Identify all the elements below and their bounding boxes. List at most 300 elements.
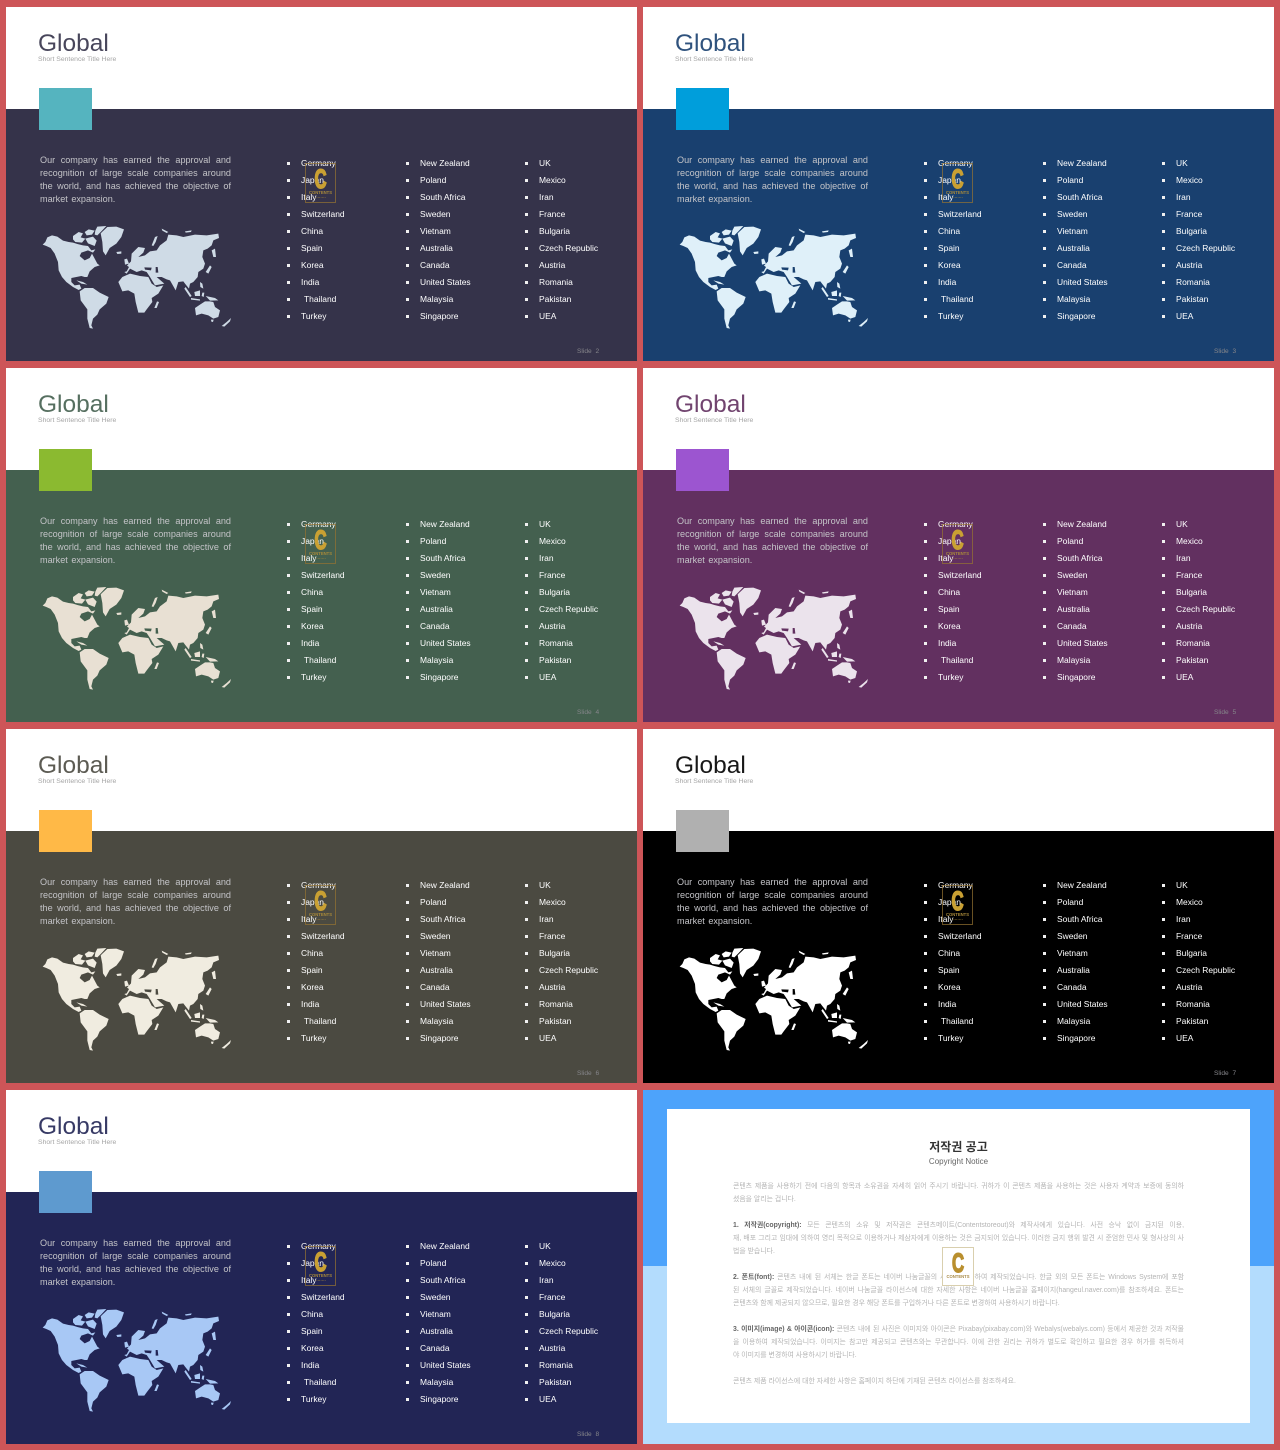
country list: column 2: Poland xyxy=(1057,897,1083,907)
country list: column 2: New Zealand xyxy=(420,158,470,168)
dark band xyxy=(644,109,1274,361)
country list: column 3: Iran xyxy=(539,1275,554,1285)
country list: column 3: Romania xyxy=(1176,277,1210,287)
country list: column 2: Poland xyxy=(420,897,446,907)
country list: column 3: UK xyxy=(539,1241,551,1251)
text block: description: recognition of large scale companies around xyxy=(40,1251,231,1261)
country list: column 1: Germany xyxy=(938,158,973,168)
country list: column 2: Singapore xyxy=(1057,672,1095,682)
country list: column 3: France xyxy=(1176,570,1202,580)
country list: column 1: Germany xyxy=(938,880,973,890)
panel: slide 6 xyxy=(7,729,637,1083)
country list: column 1: Spain xyxy=(938,243,960,253)
country list: column 2: South Africa xyxy=(1057,914,1102,924)
country list: column 2 xyxy=(1043,880,1108,1043)
watermark logo xyxy=(305,163,336,203)
country list: column 1: Spain xyxy=(301,604,323,614)
panel: slide 4 xyxy=(7,368,637,722)
watermark logo xyxy=(305,524,336,564)
country list: column 3: UEA xyxy=(539,672,556,682)
notice body text: 을 이용하여 제작되었습니다. 이미지는 참고만 제공되고 콘텐츠와는 무관합니다. 이에 관한 권리는 귀하가 별도로 확인하고 필요한 경우 허가를 취득하셔 xyxy=(733,1339,1184,1346)
country list: column 3: Austria xyxy=(539,982,565,992)
country list: column 3: Austria xyxy=(539,621,565,631)
country list: column 1: Italy xyxy=(301,914,316,924)
country list: column 2: Canada xyxy=(1057,982,1087,992)
text block: description xyxy=(677,516,868,565)
country list: column 3: Pakistan xyxy=(539,294,571,304)
country list: column 3: Czech Republic xyxy=(1176,965,1235,975)
watermark logo: ········ xyxy=(315,194,326,200)
text block: description: the world, and has achieved the objective of xyxy=(40,1264,231,1274)
accent square xyxy=(39,449,92,491)
country list: column 1: Switzerland xyxy=(301,931,345,941)
country list: column 2: Vietnam xyxy=(420,1309,451,1319)
text block: description: the world, and has achieved the objective of xyxy=(40,542,231,552)
country list: column 1: Spain xyxy=(938,965,960,975)
text block: description: recognition of large scale companies around xyxy=(40,890,231,900)
country list: column 1: Germany xyxy=(301,880,336,890)
country list: column 2: United States xyxy=(420,277,471,287)
country list: column 1: Spain xyxy=(301,1326,323,1336)
country list: column 2: New Zealand xyxy=(420,1241,470,1251)
watermark logo: ········ xyxy=(952,556,963,560)
country list: column 1: Korea xyxy=(301,260,324,270)
country list: column 1: Korea xyxy=(938,982,961,992)
country list: column 1: Turkey xyxy=(301,311,326,321)
country list: column 1: Korea xyxy=(301,1343,324,1353)
country list: column 3: Pakistan xyxy=(539,1377,571,1387)
watermark logo: CONTENTS xyxy=(309,551,332,556)
watermark logo xyxy=(942,524,973,564)
world map xyxy=(42,948,231,1051)
country list: column 2 xyxy=(1043,158,1108,321)
country list: column 1 xyxy=(287,880,345,1043)
text block: description: Our company has earned the approval and xyxy=(677,516,868,526)
text block: description xyxy=(677,876,868,926)
country list: column 3: UEA xyxy=(539,311,556,321)
country list: column 3: Bulgaria xyxy=(539,226,570,236)
country list: column 3 xyxy=(1162,880,1235,1043)
slide number: Slide 7 xyxy=(1214,1070,1236,1077)
country list: column 1: Switzerland xyxy=(301,1292,345,1302)
country list: column 2: Australia xyxy=(420,604,453,614)
country list: column 1: Korea xyxy=(938,621,961,631)
accent square xyxy=(676,88,729,130)
watermark logo: ········ xyxy=(315,916,326,922)
country list: column 1: Germany xyxy=(938,519,973,529)
country list: column 2: South Africa xyxy=(420,914,466,924)
country list: column 2: Poland xyxy=(1057,175,1083,185)
country list: column 1: Korea xyxy=(301,621,324,631)
text block: description: the world, and has achieved the objective of xyxy=(677,181,868,191)
watermark logo: C xyxy=(314,886,327,916)
subtitle: Short Sentence Title Here xyxy=(38,1139,116,1146)
country list: column 2: Malaysia xyxy=(420,1016,453,1026)
country list: column 3: France xyxy=(539,209,565,219)
country list: column 3: UEA xyxy=(539,1394,556,1404)
text block: description: the world, and has achieved the objective of xyxy=(677,542,868,552)
text block: description: market expansion. xyxy=(40,555,115,565)
country list: column 3 xyxy=(525,158,598,321)
watermark logo: C xyxy=(951,164,964,194)
text block: description: market expansion. xyxy=(677,194,752,204)
country list: column 2: United States xyxy=(420,1360,471,1370)
country list: column 2: Vietnam xyxy=(420,948,451,958)
watermark logo: ········ xyxy=(315,556,326,560)
country list: column 3 xyxy=(525,1241,598,1404)
notice body text: 재, 배포 그리고 임대에 의하여 영리 목적으로 이용하거나 제삼자에게 이용하는 것은 금지되어 있습니다. 이러한 금지 행위 발견 시 준엄한 민사 및 형사상의 사 xyxy=(733,1235,1184,1242)
country list: column 2: Australia xyxy=(1057,965,1090,975)
country list: column 3: Romania xyxy=(539,999,573,1009)
text block: description xyxy=(677,154,868,204)
country list: column 3: Pakistan xyxy=(539,1016,571,1026)
country list: column 1: Spain xyxy=(938,604,960,614)
watermark logo: ········ xyxy=(952,194,963,200)
text block: description: the world, and has achieved the objective of xyxy=(40,181,231,191)
accent square xyxy=(676,449,729,491)
country list: column 2: United States xyxy=(1057,638,1108,648)
text block: description: market expansion. xyxy=(40,916,115,926)
watermark logo: C xyxy=(951,886,964,916)
country list: column 2: South Africa xyxy=(420,553,466,563)
subtitle: Short Sentence Title Here xyxy=(675,778,753,785)
country list: column 2: Malaysia xyxy=(1057,1016,1090,1026)
country list: column 2: Sweden xyxy=(420,931,450,941)
country list: column 1: India xyxy=(301,638,319,648)
country list: column 2: Vietnam xyxy=(420,226,451,236)
country list: column 2: New Zealand xyxy=(1057,519,1107,529)
watermark logo: ········ xyxy=(952,916,963,922)
country list: column 2: Sweden xyxy=(1057,931,1088,941)
text block: description: recognition of large scale companies around xyxy=(40,168,231,178)
country list: column 1: China xyxy=(938,587,960,597)
watermark logo: C xyxy=(314,1247,327,1277)
country list: column 2: Singapore xyxy=(1057,1033,1095,1043)
text block: description: the world, and has achieved the objective of xyxy=(40,903,231,913)
country list: column 2: Vietnam xyxy=(1057,226,1088,236)
country list: column 2: Vietnam xyxy=(420,587,451,597)
text block: description: market expansion. xyxy=(677,916,752,926)
country list: column 3: UK xyxy=(1176,880,1188,890)
world map xyxy=(680,226,868,329)
title: Global xyxy=(675,391,746,418)
country list: column 1: China xyxy=(301,948,323,958)
country list: column 2: Poland xyxy=(420,536,446,546)
country list: column 2: Malaysia xyxy=(420,655,453,665)
notice body text: 3. 이미지(image) & 아이콘(icon): 콘텐츠 내에 된 사진은 이미지와 아이콘은 Pixabay(pixabay.com)와 Webalys(webalys.com) 등에서 제공한 것과 저작물 xyxy=(733,1326,1184,1333)
country list: column 2: Sweden xyxy=(420,1292,450,1302)
country list: column 2 xyxy=(406,1241,471,1404)
country list: column 2: Malaysia xyxy=(420,294,453,304)
country list: column 1: Italy xyxy=(938,914,953,924)
country list: column 1: Japan xyxy=(938,175,961,185)
text block: description: market expansion. xyxy=(40,1277,115,1287)
country list: column 1: Italy xyxy=(301,1275,316,1285)
accent square xyxy=(39,88,92,130)
text block: description xyxy=(40,876,232,926)
world map xyxy=(680,587,868,690)
country list: column 2 xyxy=(406,880,471,1043)
country list: column 1: Germany xyxy=(301,1241,336,1251)
country list: column 2: Malaysia xyxy=(420,1377,453,1387)
country list: column 1: Turkey xyxy=(938,1033,963,1043)
country list: column 2: Sweden xyxy=(1057,570,1088,580)
country list: column 3: Mexico xyxy=(539,536,566,546)
country list: column 1: Switzerland xyxy=(938,931,982,941)
slide number: Slide 2 xyxy=(577,348,599,355)
country list: column 3: France xyxy=(1176,209,1202,219)
watermark logo: CONTENTS xyxy=(946,912,969,917)
country list: column 2: United States xyxy=(420,638,471,648)
watermark logo: CONTENTS xyxy=(309,190,332,195)
heading: Korean: 저작권 공고 xyxy=(929,1140,988,1154)
country list: column 1: Japan xyxy=(301,536,324,546)
watermark logo: C xyxy=(952,1248,964,1278)
country list: column 1: China xyxy=(938,948,960,958)
country list: column 1: Italy xyxy=(938,553,953,563)
country list: column 2 xyxy=(406,158,471,321)
country list: column 1: Japan xyxy=(301,1258,324,1268)
text block: description: the world, and has achieved the objective of xyxy=(677,903,868,913)
country list: column 1: China xyxy=(938,226,960,236)
country list: column 3: Austria xyxy=(539,1343,565,1353)
text block: description: market expansion. xyxy=(40,194,115,204)
watermark logo: ········ xyxy=(315,1278,326,1282)
country list: column 1: India xyxy=(301,999,319,1009)
country list: column 3: Czech Republic xyxy=(539,1326,598,1336)
country list: column 2: Poland xyxy=(420,1258,446,1268)
text block: description: recognition of large scale companies around xyxy=(677,890,868,900)
country list: column 3: Pakistan xyxy=(1176,1016,1208,1026)
slide number: Slide 6 xyxy=(577,1070,599,1077)
country list: column 3: Mexico xyxy=(1176,897,1203,907)
country list: column 3: Iran xyxy=(1176,914,1191,924)
accent square xyxy=(39,1171,92,1213)
world map xyxy=(42,587,231,690)
watermark logo: CONTENTS xyxy=(946,1274,970,1279)
country list: column 2: Canada xyxy=(1057,621,1087,631)
country list: column 2: United States xyxy=(420,999,471,1009)
notice body text: 콘텐츠 제품을 사용하기 전에 다음의 항목과 소유권을 자세히 읽어 주시기 바랍니다. 귀하가 이 콘텐츠 제품을 사용하는 것은 사용자 계약과 보증에 동의하 xyxy=(733,1183,1184,1190)
country list: column 3: Romania xyxy=(539,1360,573,1370)
notice body text: 야 이미지를 변경하여 사용하시기 바랍니다. xyxy=(733,1352,857,1359)
watermark logo xyxy=(305,885,336,925)
country list: column 2: Poland xyxy=(1057,536,1083,546)
country list: column 2: Malaysia xyxy=(1057,294,1090,304)
country list: column 2: New Zealand xyxy=(1057,158,1107,168)
watermark logo: C xyxy=(951,525,964,555)
notice body text: 콘텐츠 제품 라이선스에 대한 자세한 사항은 홈페이지 하단에 기재된 콘텐츠 라이선스를 참조하세요. xyxy=(733,1378,1016,1385)
country list: column 2: Vietnam xyxy=(1057,587,1088,597)
country list: column 2 xyxy=(1043,519,1108,682)
country list: column 1: Turkey xyxy=(301,1394,326,1404)
title: Global xyxy=(675,30,746,57)
country list: column 3: Czech Republic xyxy=(539,965,598,975)
country list: column 3: Pakistan xyxy=(1176,655,1208,665)
country list: column 1 xyxy=(287,519,345,682)
notice body text: 셨음을 알리는 겁니다. xyxy=(733,1196,796,1203)
subtitle: Short Sentence Title Here xyxy=(38,417,116,424)
country list: column 1: Japan xyxy=(938,897,961,907)
country list: column 2: Canada xyxy=(420,982,450,992)
country list: column 2: United States xyxy=(1057,999,1108,1009)
dark band xyxy=(7,831,637,1083)
text block: description: market expansion. xyxy=(677,555,752,565)
notice body text: 2. 폰트(font): 콘텐츠 내에 된 서체는 한글 폰트는 네이버 나눔글꼴의 서체를 사용하여 제작되었습니다. 한글 외의 모든 폰트는 Windows System에 포함 xyxy=(733,1274,1184,1281)
country list: column 2: Malaysia xyxy=(1057,655,1090,665)
accent square xyxy=(39,810,92,852)
watermark logo xyxy=(942,163,973,203)
watermark logo xyxy=(942,1247,974,1286)
notice body text: 콘텐츠와 함께 제공되지 않으므로, 필요한 경우 해당 폰트를 구입하거나 다른 폰트로 변경하여 사용하시기 바랍니다. xyxy=(733,1300,1060,1307)
country list: column 2: South Africa xyxy=(420,1275,466,1285)
country list: column 1: Switzerland xyxy=(938,570,982,580)
country list: column 3: Bulgaria xyxy=(1176,226,1207,236)
country list: column 1: Italy xyxy=(301,192,316,202)
country list: column 3: Bulgaria xyxy=(539,587,570,597)
watermark logo xyxy=(942,885,973,925)
background: blue upper half xyxy=(643,1090,1274,1266)
subtitle: Short Sentence Title Here xyxy=(675,417,753,424)
country list: column 1: Switzerland xyxy=(938,209,982,219)
text block: description: Our company has earned the approval and xyxy=(677,876,868,886)
country list: column 3: UK xyxy=(539,519,551,529)
country list: column 2: Australia xyxy=(420,1326,453,1336)
country list: column 3: Mexico xyxy=(539,897,566,907)
country list: column 1: Germany xyxy=(301,519,336,529)
country list: column 1 xyxy=(924,880,982,1043)
country list: column 1: Thailand xyxy=(304,1016,336,1026)
country list: column 2 xyxy=(406,519,471,682)
country list: column 3 xyxy=(1162,158,1235,321)
country list: column 2: Canada xyxy=(420,621,450,631)
background: light blue lower half xyxy=(643,1266,1274,1444)
country list: column 1: China xyxy=(301,226,323,236)
country list: column 2: South Africa xyxy=(1057,192,1102,202)
country list: column 2: Poland xyxy=(420,175,446,185)
country list: column 1: China xyxy=(301,1309,323,1319)
country list: column 1: Spain xyxy=(301,965,323,975)
country list: column 1: Switzerland xyxy=(301,570,345,580)
world map xyxy=(680,948,868,1051)
panel: slide 2 xyxy=(7,7,637,361)
country list: column 3: Czech Republic xyxy=(539,243,598,253)
country list: column 3: UK xyxy=(539,880,551,890)
country list: column 3: Romania xyxy=(1176,638,1210,648)
watermark logo: CONTENTS xyxy=(309,1273,332,1278)
country list: column 1: China xyxy=(301,587,323,597)
text block: description: Our company has earned the approval and xyxy=(40,516,231,526)
country list: column 1: Thailand xyxy=(304,1377,336,1387)
country list: column 2: Sweden xyxy=(420,570,450,580)
country list: column 1 xyxy=(924,158,982,321)
subtitle: Short Sentence Title Here xyxy=(38,778,116,785)
country list: column 3: UEA xyxy=(539,1033,556,1043)
country list: column 3: France xyxy=(539,931,565,941)
country list: column 2: South Africa xyxy=(420,192,466,202)
country list: column 3: UEA xyxy=(1176,1033,1193,1043)
country list: column 1: Switzerland xyxy=(301,209,345,219)
country list: column 3: Iran xyxy=(1176,192,1191,202)
country list: column 3: Bulgaria xyxy=(539,948,570,958)
country list: column 3 xyxy=(525,519,598,682)
dark band xyxy=(7,109,637,361)
country list: column 1 xyxy=(924,519,982,682)
slide number: Slide 3 xyxy=(1214,348,1236,355)
country list: column 3: Mexico xyxy=(539,1258,566,1268)
text block: description: recognition of large scale companies around xyxy=(677,168,868,178)
country list: column 2: Australia xyxy=(1057,243,1090,253)
title: Global xyxy=(38,30,109,57)
country list: column 2: Vietnam xyxy=(1057,948,1088,958)
dark band xyxy=(644,831,1274,1083)
country list: column 2: Australia xyxy=(420,965,453,975)
country list: column 1 xyxy=(287,158,345,321)
title: Global xyxy=(675,752,746,779)
country list: column 3: France xyxy=(539,1292,565,1302)
text block: description: recognition of large scale companies around xyxy=(677,529,868,539)
country list: column 3: Iran xyxy=(539,553,554,563)
country list: column 3: Czech Republic xyxy=(1176,604,1235,614)
country list: column 3: UK xyxy=(1176,158,1188,168)
country list: column 1: Japan xyxy=(301,175,324,185)
country list: column 3: Pakistan xyxy=(539,655,571,665)
text block: description xyxy=(40,154,232,204)
country list: column 2: Canada xyxy=(1057,260,1087,270)
title: Global xyxy=(38,752,109,779)
panel: slide 5 xyxy=(644,368,1274,722)
watermark logo: CONTENTS xyxy=(946,551,969,556)
country list: column 1: Spain xyxy=(301,243,323,253)
notice body text: 1. 저작권(copyright): 모든 콘텐츠의 소유 및 저작권은 콘텐츠메이트(Contentstoreout)와 제작사에게 있습니다. 사전 승낙 없이 금지된 이용, xyxy=(733,1222,1184,1229)
text block: description: Our company has earned the approval and xyxy=(677,154,868,164)
country list: column 1: India xyxy=(938,638,956,648)
country list: column 3: Mexico xyxy=(1176,536,1203,546)
country list: column 1: India xyxy=(938,999,956,1009)
country list: column 1: Thailand xyxy=(941,1016,973,1026)
white notice card xyxy=(667,1109,1250,1423)
country list: column 2: Australia xyxy=(420,243,453,253)
country list: column 1: Thailand xyxy=(941,655,973,665)
country list: column 1: Turkey xyxy=(938,672,963,682)
slide number: Slide 5 xyxy=(1214,709,1236,716)
country list: column 3: Czech Republic xyxy=(539,604,598,614)
slide number: Slide 4 xyxy=(577,709,599,716)
country list: column 3: UK xyxy=(1176,519,1188,529)
country list: column 1: Thailand xyxy=(304,294,336,304)
country list: column 1: Korea xyxy=(938,260,961,270)
subtitle: Short Sentence Title Here xyxy=(38,56,116,63)
dark band xyxy=(7,470,637,722)
panel: slide 8 xyxy=(7,1090,637,1444)
country list: column 3: Iran xyxy=(539,914,554,924)
country list: column 3: Austria xyxy=(1176,621,1202,631)
world map xyxy=(42,226,231,329)
heading: English: Copyright Notice xyxy=(929,1157,988,1166)
notice body text: 법을 받습니다. xyxy=(733,1248,775,1255)
country list: column 1: Germany xyxy=(301,158,336,168)
country list: column 3: Austria xyxy=(539,260,565,270)
country list: column 3: Austria xyxy=(1176,260,1202,270)
dark band xyxy=(7,1192,637,1444)
country list: column 1: Korea xyxy=(301,982,324,992)
country list: column 2: Singapore xyxy=(420,672,458,682)
text block: description xyxy=(40,1238,232,1287)
country list: column 1: Thailand xyxy=(304,655,336,665)
country list: column 1: Italy xyxy=(938,192,953,202)
country list: column 3: Romania xyxy=(539,638,573,648)
country list: column 2: Singapore xyxy=(420,1033,458,1043)
